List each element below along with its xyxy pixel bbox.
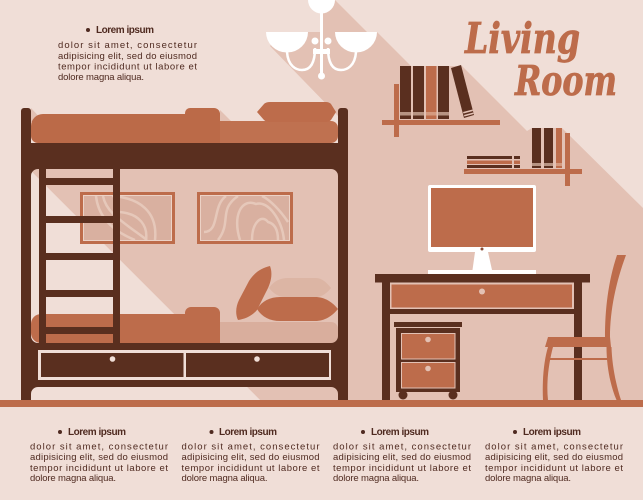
bookshelf: upper	[382, 65, 500, 137]
text block: column 3	[333, 427, 471, 484]
text block: column 2	[182, 427, 320, 484]
text block: column 3: tempor incididunt ut labore et	[333, 463, 471, 474]
text block: column 4	[485, 427, 623, 484]
lean pillow	[236, 266, 271, 320]
bookshelf: lower	[464, 128, 582, 186]
computer monitor	[428, 185, 536, 274]
wall picture: left	[80, 192, 175, 244]
light wall panels inside bunk	[31, 169, 260, 400]
text block: top: Lorem ipsum	[96, 25, 154, 36]
small shadows on upper bunk	[31, 108, 232, 122]
text block: column 1: dolor sit amet, consectetur	[30, 442, 168, 452]
upper pillow	[257, 102, 336, 122]
long diagonal shadow	[31, 0, 643, 400]
ladder	[39, 169, 46, 343]
text block: top: dolore magna aliqua.	[58, 72, 144, 83]
text block: column 2: Lorem ipsum	[219, 427, 277, 438]
drawer cabinet	[394, 322, 462, 400]
drawers	[38, 350, 331, 380]
text block: column 2: dolore magna aliqua.	[182, 473, 268, 484]
upper duvet	[31, 108, 220, 143]
text block: column 1: adipisicing elit, sed do eiusmod	[30, 452, 168, 463]
rust pillow	[257, 297, 338, 321]
text block: column 4: Lorem ipsum	[523, 427, 581, 438]
lower duvet	[31, 307, 220, 343]
wall picture: right	[197, 192, 293, 244]
light pillow	[269, 278, 331, 297]
text block: column 3: dolor sit amet, consectetur	[333, 442, 471, 452]
floor	[0, 400, 643, 407]
text block: column 2: dolor sit amet, consectetur	[182, 442, 320, 452]
text block: column 4: dolor sit amet, consectetur	[485, 442, 623, 452]
text block: column 3: dolore magna aliqua.	[333, 473, 419, 484]
desk	[375, 274, 590, 400]
posts and frames	[21, 108, 31, 400]
text block: column 1	[30, 427, 168, 484]
text block: top: tempor incididunt ut labore et	[58, 62, 197, 72]
text block: column 1: tempor incididunt ut labore et	[30, 463, 168, 474]
text block: column 3: adipisicing elit, sed do eiusmod	[333, 452, 471, 463]
title: Living	[464, 14, 580, 63]
title	[464, 14, 617, 105]
text block: top	[58, 25, 197, 83]
text block: column 4: adipisicing elit, sed do eiusmod	[485, 452, 623, 463]
upper mattress	[200, 121, 338, 143]
chandelier	[266, 0, 377, 80]
text block: column 4: tempor incididunt ut labore et	[485, 463, 623, 474]
bunk bed	[21, 102, 348, 400]
text block: top: adipisicing elit, sed do eiusmod	[58, 51, 197, 62]
frame corners	[31, 169, 338, 394]
text block: column 3: Lorem ipsum	[371, 427, 429, 438]
text block: column 1: Lorem ipsum	[68, 427, 126, 438]
text block: column 4: dolore magna aliqua.	[485, 473, 571, 484]
lower mattress	[180, 322, 338, 343]
chair	[543, 255, 626, 400]
text block: top: dolor sit amet, consectetur	[58, 40, 197, 51]
text block: column 2: adipisicing elit, sed do eiusmod	[182, 452, 320, 463]
text block: column 1: dolore magna aliqua.	[30, 473, 116, 484]
text block: column 2: tempor incididunt ut labore et	[182, 463, 320, 474]
